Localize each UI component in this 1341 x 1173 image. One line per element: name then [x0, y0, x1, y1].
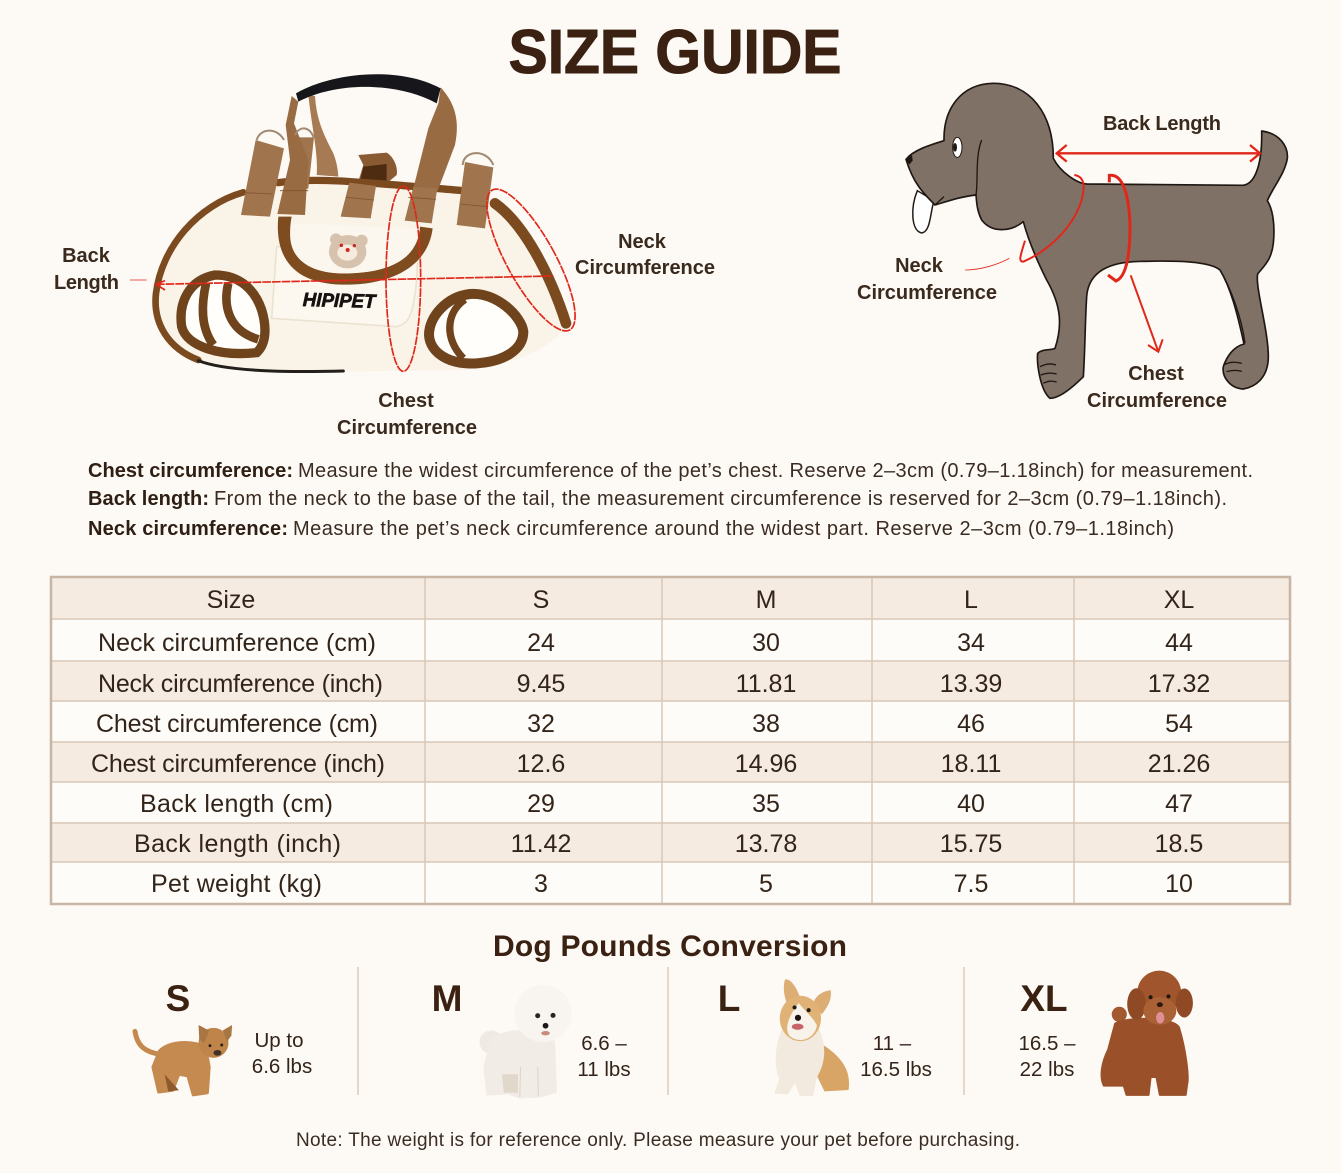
header row: M: [756, 586, 776, 614]
L weight: 16.5 lbs: [860, 1058, 932, 1081]
measurement instructions: [88, 460, 1253, 540]
row: back cm: Back length (cm): [140, 790, 333, 818]
row: back cm: 29: [527, 790, 555, 818]
row: chest inch: 14.96: [735, 750, 797, 778]
illustration: dog with measurement lines: [906, 83, 1287, 398]
neck instruction: Neck circumference:: [88, 518, 288, 540]
row: chest inch: 12.6: [517, 750, 565, 778]
label: dog neck circumference: Neck: [895, 255, 944, 277]
row: neck cm: 30: [752, 629, 780, 657]
conversion heading: Dog Pounds Conversion: [493, 930, 847, 963]
size S group: [135, 978, 312, 1095]
row: back inch: 13.78: [735, 830, 797, 858]
size table: [51, 577, 1290, 904]
bag lower pocket: [272, 247, 418, 327]
bag pocket flap: [278, 217, 433, 285]
chest instruction: Measure the widest circumference of the pet’s chest. Reserve 2–3cm (0.79–1.18inch) for measurement.: [298, 460, 1253, 482]
row: neck inch: Neck circumference (inch): [98, 670, 383, 698]
title: SIZE GUIDE: [508, 18, 842, 87]
row: chest cm: 38: [752, 710, 780, 738]
S weight: [252, 1029, 312, 1078]
bag bear badge: [329, 233, 368, 268]
bag right leg loop: [429, 294, 523, 363]
label: dog chest circumference: Chest: [1128, 363, 1184, 385]
size XL group: [1018, 971, 1193, 1095]
row: pet weight: 3: [534, 870, 548, 898]
S weight: Up to: [254, 1029, 304, 1052]
chest circumference mark: [1108, 175, 1130, 281]
back length arrow: [1057, 145, 1260, 162]
neck circumference mark: [1020, 175, 1084, 262]
XL label: XL: [1020, 978, 1068, 1019]
M weight: [577, 1032, 631, 1081]
row: back cm: 40: [957, 790, 985, 818]
header row: L: [964, 586, 978, 614]
row: neck cm: [98, 629, 1193, 657]
bag flap fill: [290, 223, 419, 273]
label: bag neck circumference: Circumference: [575, 257, 715, 279]
bag rear strap and upper trim: [308, 95, 397, 183]
label: dog neck circumference: [857, 255, 997, 304]
L weight: 11 –: [873, 1032, 912, 1055]
row: back cm: 35: [752, 790, 780, 818]
S label: S: [166, 978, 190, 1019]
row: pet weight: Pet weight (kg): [151, 870, 322, 898]
header row: [207, 586, 1194, 614]
neck instruction: Measure the pet’s neck circumference around the widest part. Reserve 2–3cm (0.79–1.18inch): [293, 518, 1174, 540]
icon: white fluffy dog: [479, 985, 572, 1097]
row: pet weight: 5: [759, 870, 773, 898]
row: back cm: [140, 790, 1193, 818]
M weight: 11 lbs: [577, 1058, 631, 1081]
XL weight: 16.5 –: [1018, 1032, 1076, 1055]
XL weight: [1018, 1032, 1076, 1081]
label: bag chest circumference: Circumference: [337, 417, 477, 439]
label: bag chest circumference: [337, 390, 477, 439]
label: dog back length: Back Length: [1103, 113, 1221, 135]
row: neck cm: Neck circumference (cm): [98, 629, 376, 657]
row: back inch: 11.42: [511, 830, 571, 858]
row: pet weight: 7.5: [954, 870, 988, 898]
label: bag neck circumference: [575, 231, 715, 279]
L label: L: [718, 978, 740, 1019]
chest arrow: [1131, 275, 1163, 352]
icon: corgi: [776, 979, 849, 1095]
S weight: 6.6 lbs: [252, 1055, 312, 1078]
row: chest cm: Chest circumference (cm): [96, 710, 378, 738]
row: neck cm: 44: [1165, 629, 1193, 657]
bag handle: [296, 74, 441, 103]
header row: Size: [207, 586, 255, 614]
M label: M: [432, 978, 462, 1019]
row: chest inch: [91, 750, 1210, 778]
icon: small tan puppy: [135, 1025, 232, 1095]
row: pet weight: [151, 870, 1193, 898]
L weight: [860, 1032, 932, 1081]
row: neck cm: 24: [527, 629, 555, 657]
row: neck cm: 34: [957, 629, 985, 657]
row: back inch: Back length (inch): [134, 830, 341, 858]
M weight: 6.6 –: [581, 1032, 627, 1055]
icon: red poodle: [1102, 971, 1193, 1095]
label: dog chest circumference: [1087, 363, 1227, 412]
row: pet weight: 10: [1165, 870, 1193, 898]
row: chest cm: 32: [527, 710, 555, 738]
label: dog chest circumference: Circumference: [1087, 390, 1227, 412]
row: chest cm: 54: [1165, 710, 1193, 738]
row: back cm: 47: [1165, 790, 1193, 818]
column dividers: [358, 967, 964, 1095]
illustration: carrier bag with measurement lines: [130, 74, 591, 372]
dog body silhouette: [906, 83, 1287, 398]
bag body: [153, 182, 571, 372]
neck leader line: [965, 258, 1009, 270]
row: neck inch: 13.39: [940, 670, 1002, 698]
row: back inch: 15.75: [940, 830, 1002, 858]
row: chest inch: 18.11: [941, 750, 1001, 778]
header row: XL: [1164, 586, 1194, 614]
label: bag neck circumference: Neck: [618, 231, 667, 253]
bag metal rings: [257, 128, 493, 165]
red measurement markings: [130, 178, 591, 371]
row: neck inch: 9.45: [517, 670, 565, 698]
label: bag back length: [54, 245, 119, 294]
label: bag chest circumference: Chest: [378, 390, 434, 412]
row: chest inch: Chest circumference (inch): [91, 750, 385, 778]
bag piping: [156, 180, 566, 372]
size L group: [718, 978, 932, 1095]
row: neck inch: 11.81: [736, 670, 796, 698]
label: dog neck circumference: Circumference: [857, 282, 997, 304]
back instruction: From the neck to the base of the tail, the measurement circumference is reserved for 2–3cm (0.79–1.18inch).: [214, 488, 1227, 510]
dog tongue: [913, 191, 934, 233]
label: bag back length: Length: [54, 272, 119, 294]
row: back inch: [134, 830, 1203, 858]
bag brand text: HIPIPET: [303, 290, 378, 313]
row: chest cm: 46: [957, 710, 985, 738]
row: chest inch: 21.26: [1148, 750, 1210, 778]
footnote: Note: The weight is for reference only. Please measure your pet before purchasing.: [296, 1130, 1020, 1151]
row: back inch: 18.5: [1155, 830, 1203, 858]
row: chest cm: [96, 710, 1193, 738]
bag left leg loop: [181, 275, 265, 354]
row: neck inch: [98, 670, 1210, 698]
size M group: [432, 978, 631, 1097]
back instruction: Back length:: [88, 488, 209, 510]
dog eye: [953, 137, 962, 157]
bag tab stitching: [245, 191, 488, 207]
dog detail lines: [935, 140, 1245, 383]
XL weight: 22 lbs: [1020, 1058, 1074, 1081]
label: bag back length: Back: [62, 245, 111, 267]
chest instruction: Chest circumference:: [88, 460, 293, 482]
dog nose: [906, 155, 913, 165]
row: neck inch: 17.32: [1148, 670, 1210, 698]
bag straps: [241, 87, 493, 228]
header row: S: [533, 586, 549, 614]
